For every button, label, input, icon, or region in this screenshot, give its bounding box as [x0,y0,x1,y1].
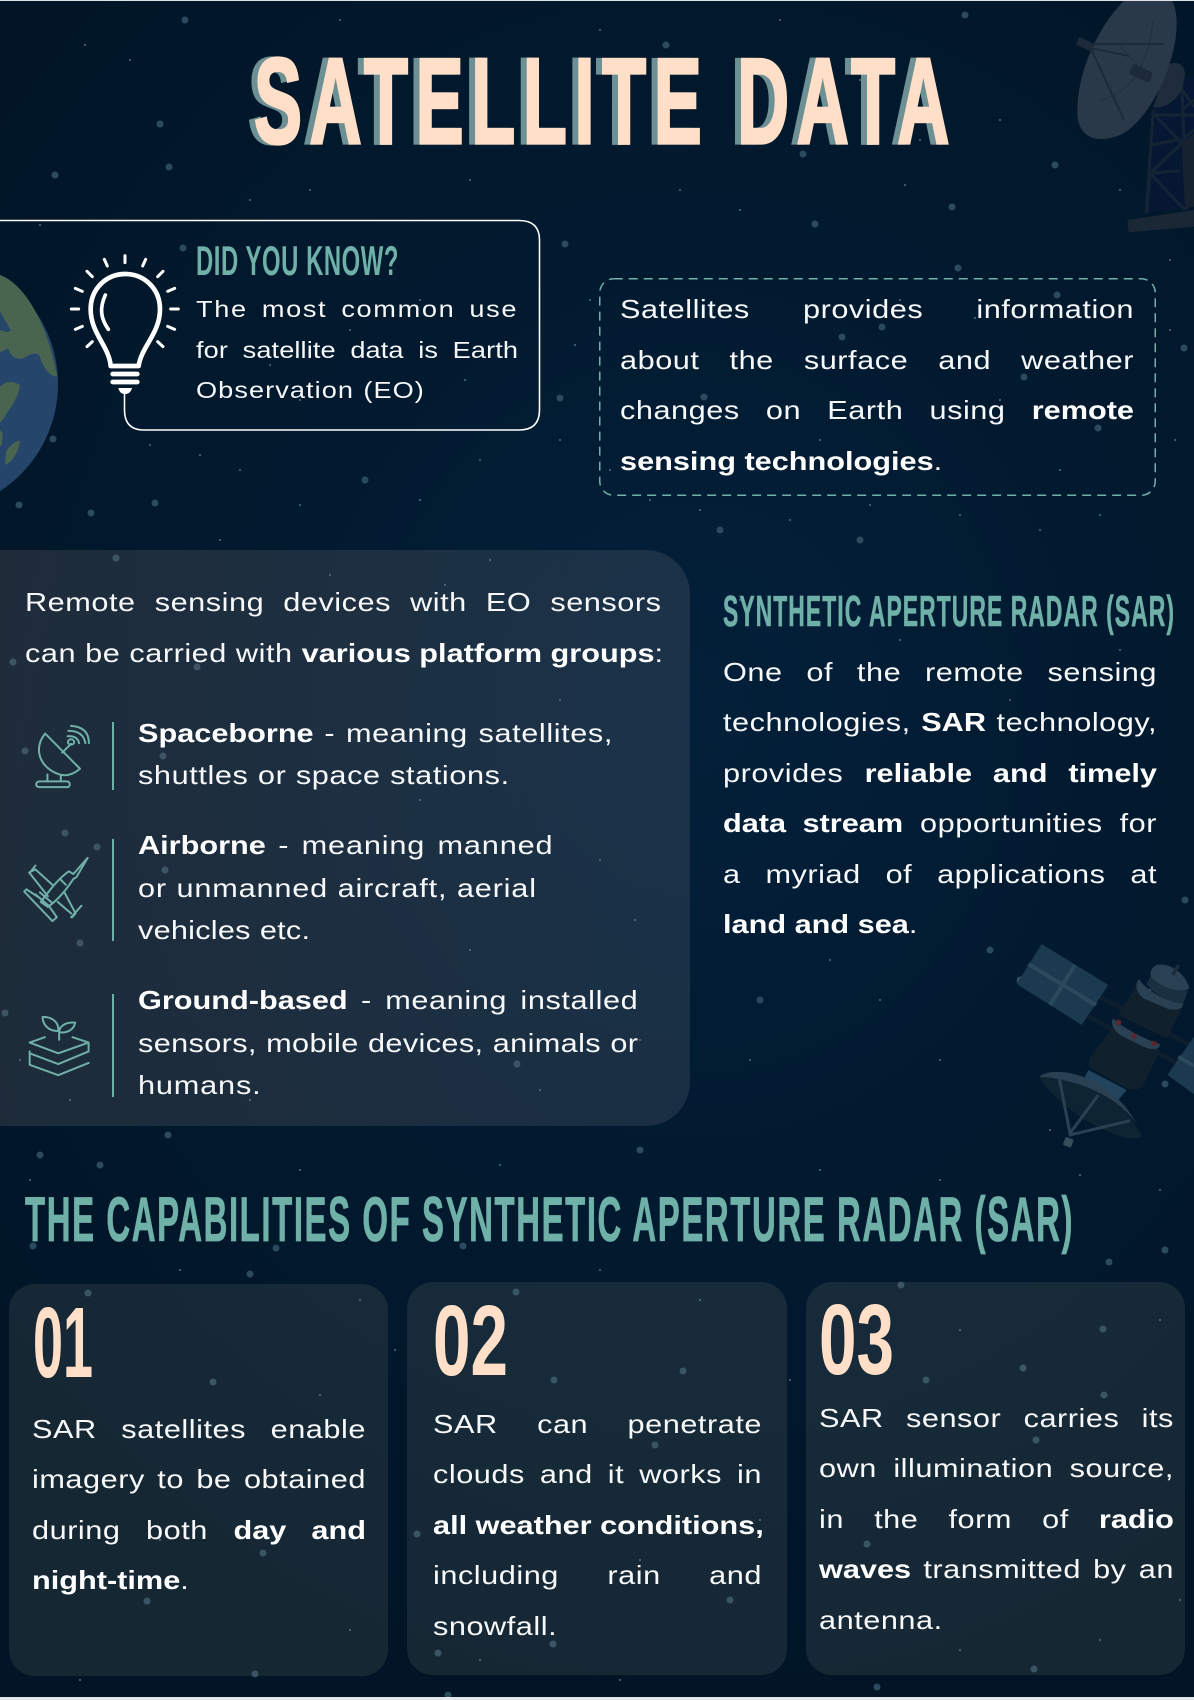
panel intro text: can be carried with various platform groups: [24,638,663,668]
card 01 text: imagery to be obtained [32,1464,366,1494]
spaceborne text: shuttles or space stations. [138,760,509,790]
SAR description text: One of the remote sensing [723,657,1157,687]
illustration: satellite right side [1016,944,1194,1148]
divider bar [112,994,114,1097]
SAR description text: land and sea. [723,909,918,939]
card 02 [407,1282,787,1675]
ground-based text: humans. [138,1070,261,1100]
card 03 text: antenna. [819,1605,943,1635]
card 02 text: snowfall. [433,1611,557,1641]
SAR description text: data stream opportunities for [723,808,1157,838]
airborne text: or unmanned aircraft, aerial [138,872,536,902]
card 03 text: in the form of radio [819,1504,1174,1534]
callout outline with lightbulb icon [0,220,540,431]
callout text: for satellite data is Earth [196,336,518,362]
info text: changes on Earth using remote [620,395,1134,425]
spaceborne text [138,718,612,790]
card 02 text: SAR can penetrate [433,1409,762,1439]
panel intro text: Remote sensing devices with EO sensors [24,587,661,617]
card 03 text: own illumination source, [819,1453,1174,1483]
card 01 text: night-time. [32,1565,189,1595]
item: spaceborne [35,718,612,790]
icon: plant on soil layers [28,1016,90,1076]
info text [620,294,1134,476]
ground-based text: sensors, mobile devices, animals or [138,1028,638,1058]
illustration: Earth globe at left edge [0,275,58,491]
airborne text: vehicles etc. [138,915,310,945]
divider bar [112,722,114,790]
divider bar [112,838,114,940]
callout text: Observation (EO) [196,377,425,403]
callout text: The most common use [196,296,518,322]
card 03 text [818,1403,1174,1635]
spaceborne text: Spaceborne - meaning satellites, [138,718,612,748]
card 01 [9,1284,388,1676]
SAR description text: technologies, SAR technology, [723,707,1157,737]
card 03 [806,1282,1185,1675]
card 02 text: clouds and it works in [433,1459,762,1489]
icon: satellite dish [35,724,90,788]
callout text [196,296,518,403]
card 01 text: during both day and [32,1515,366,1545]
card 03 text: waves transmitted by an [819,1554,1174,1584]
airborne text: Airborne - meaning manned [138,830,553,860]
dashed border [599,278,1156,496]
SAR description text: a myriad of applications at [723,859,1157,889]
callout: did you know [0,220,540,431]
dashed info box [599,278,1156,496]
card 01 text: SAR satellites enable [32,1414,366,1444]
card 02 text: all weather conditions, [433,1510,764,1540]
number 01: 01 [33,1287,93,1399]
card 02 text [433,1409,764,1641]
card 02 text: including rain and [433,1560,762,1590]
number 03: 03 [819,1284,894,1396]
card 01 text [32,1414,366,1595]
ground-based text: Ground-based - meaning installed [138,985,638,1015]
info text: sensing technologies. [620,446,943,476]
ground-based text [138,985,638,1100]
card 03 text: SAR sensor carries its [819,1403,1174,1433]
callout heading: DID YOU KNOW? [196,237,399,284]
item: airborne [23,830,553,945]
SAR description text: provides reliable and timely [723,758,1157,788]
icon: jet aircraft [23,856,89,922]
item: ground-based [28,985,638,1100]
info text: Satellites provides information [620,294,1134,324]
panel intro text [24,587,663,668]
info text: about the surface and weather [620,345,1134,375]
panel: platform groups [0,550,690,1126]
airborne text [138,830,553,945]
SAR description text [723,657,1157,939]
illustration: radio telescope dish top right [1076,1,1194,232]
number 02: 02 [433,1285,508,1397]
